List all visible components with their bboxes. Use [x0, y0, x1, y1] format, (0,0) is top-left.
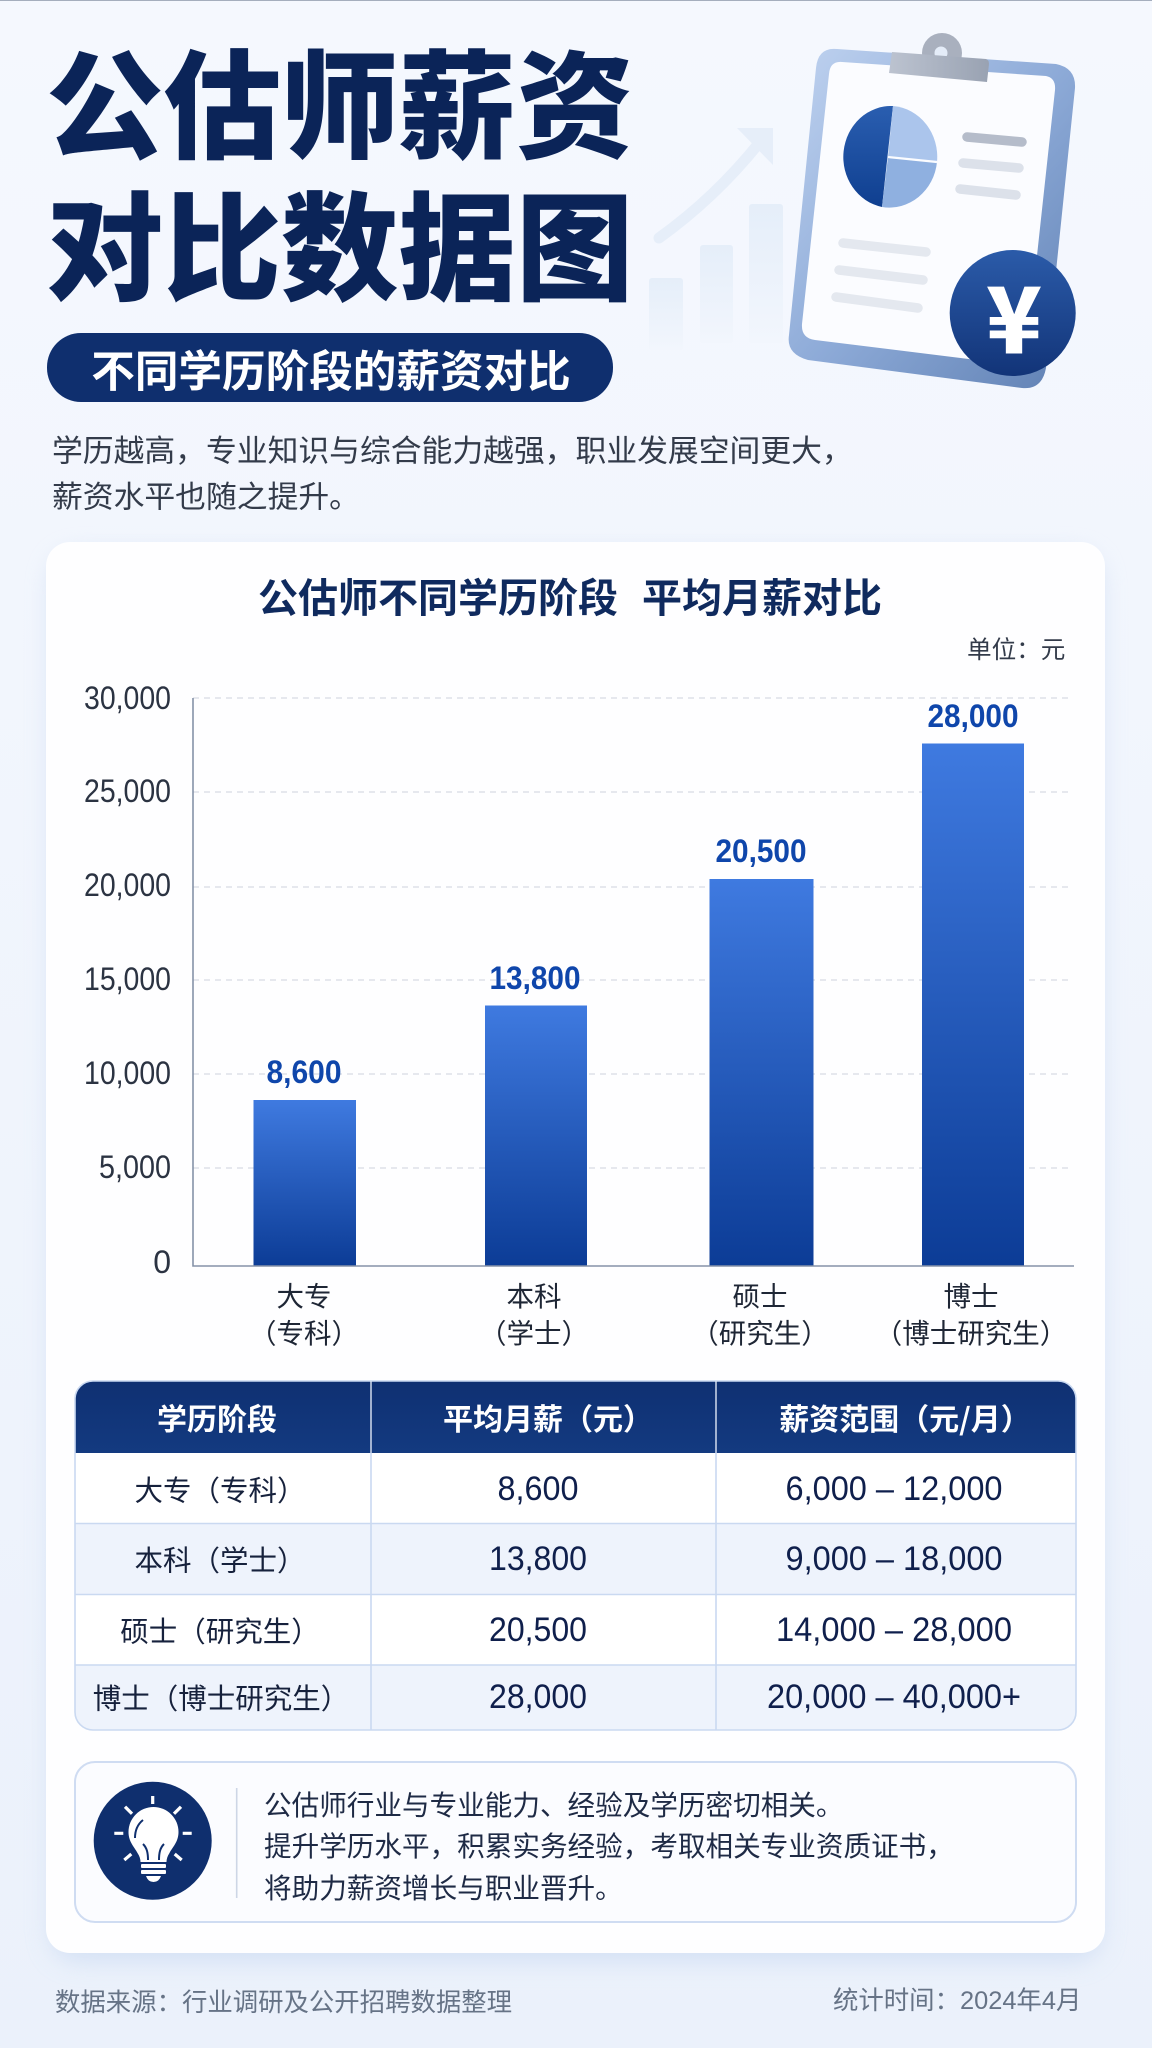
footer: 统计时间：2024年4月	[833, 1987, 1081, 2015]
pie chart	[843, 106, 937, 208]
table salary values: 9,000 – 18,000	[786, 1540, 1002, 1578]
table header text: 学历阶段	[157, 1395, 277, 1439]
table salary values: 14,000 – 28,000	[776, 1611, 1012, 1649]
table	[75, 1381, 1076, 1730]
clipboard paper	[802, 62, 1055, 366]
x axis labels: （专科）	[249, 1311, 359, 1351]
callout box	[75, 1762, 1076, 1922]
unit label: 单位：元	[967, 630, 1065, 666]
bar values: 28,000	[928, 698, 1018, 734]
chart title: 公估师不同学历阶段	[258, 566, 618, 624]
x axis labels: 本科	[506, 1274, 562, 1314]
chart title part two: 平均月薪对比	[642, 566, 882, 624]
icon: clipboard	[789, 33, 1076, 388]
table rows background	[76, 1524, 1075, 1729]
callout text: 将助力薪资增长与职业晋升。	[264, 1866, 623, 1906]
bar values	[266, 698, 1018, 1090]
bar chart	[84, 680, 1074, 1351]
y axis labels: 25,000	[84, 773, 171, 809]
grid lines	[193, 698, 1072, 1168]
bar values: 13,800	[490, 960, 580, 996]
intro text: 薪资水平也随之提升。	[52, 472, 360, 516]
icon: light bulb	[94, 1782, 212, 1900]
y axis labels: 10,000	[84, 1055, 171, 1091]
card shadow	[50, 552, 1102, 1962]
axes	[193, 698, 1074, 1266]
table first column: 博士（博士研究生）	[93, 1676, 349, 1718]
divider	[236, 1788, 238, 1898]
table first column	[93, 1468, 349, 1718]
table borders	[75, 1381, 1076, 1730]
intro text	[52, 426, 853, 516]
table first column: 本科（学士）	[134, 1538, 306, 1580]
x axis labels: 硕士	[732, 1274, 788, 1314]
panel: main card	[46, 542, 1105, 1953]
table salary values: 13,800	[489, 1540, 587, 1578]
title	[46, 13, 634, 325]
x axis labels: 博士	[944, 1274, 998, 1314]
x axis labels: 大专	[276, 1274, 332, 1314]
callout text: 公估师行业与专业能力、经验及学历密切相关。	[264, 1783, 843, 1823]
y axis labels: 5,000	[99, 1149, 171, 1185]
table header text	[157, 1395, 1031, 1439]
x axis labels: （博士研究生）	[875, 1311, 1067, 1351]
x axis labels: （研究生）	[691, 1311, 829, 1351]
table salary values	[489, 1470, 1021, 1716]
x axis labels	[249, 1274, 1067, 1351]
table header text: 薪资范围（元/月）	[779, 1395, 1031, 1439]
table first column: 硕士（研究生）	[120, 1610, 320, 1650]
bar: 大专	[254, 1100, 356, 1266]
icon: yen coin	[950, 248, 1076, 380]
subtitle pill: 不同学历阶段的薪资对比	[91, 336, 571, 400]
title: 对比数据图	[46, 155, 634, 325]
table salary values: 8,600	[498, 1470, 578, 1508]
footer	[55, 1983, 1081, 2019]
table first column: 大专（专科）	[134, 1468, 306, 1510]
intro text: 学历越高，专业知识与综合能力越强，职业发展空间更大，	[52, 426, 853, 470]
bar: 本科	[485, 1006, 587, 1266]
y axis labels: 20,000	[84, 867, 171, 903]
table salary values: 20,500	[489, 1611, 587, 1649]
clipboard board	[789, 49, 1075, 388]
callout text: 提升学历水平，积累实务经验，考取相关专业资质证书，	[264, 1824, 954, 1864]
icon: yen coin: ¥	[986, 248, 1042, 380]
icon: faint rising bars and arrow	[649, 128, 783, 350]
table header background	[75, 1381, 1076, 1453]
table salary values: 20,000 – 40,000+	[767, 1678, 1021, 1716]
table salary values: 28,000	[489, 1678, 587, 1716]
title: 公估师薪资	[46, 13, 634, 183]
bar values: 20,500	[716, 833, 806, 869]
footer: 数据来源：行业调研及公开招聘数据整理	[55, 1983, 512, 2019]
y axis labels	[84, 680, 171, 1280]
y axis labels: 15,000	[84, 961, 171, 997]
y axis labels: 0	[153, 1244, 171, 1280]
bar: 博士	[922, 744, 1024, 1266]
list lines	[836, 137, 1022, 308]
table salary values: 6,000 – 12,000	[786, 1470, 1002, 1508]
bar values: 8,600	[266, 1054, 342, 1090]
table header text: 平均月薪（元）	[443, 1395, 653, 1439]
clipboard clamp	[889, 33, 989, 82]
callout text	[264, 1783, 954, 1906]
x axis labels: （学士）	[479, 1311, 589, 1351]
bar: 硕士	[710, 879, 814, 1266]
y axis labels: 30,000	[84, 680, 171, 716]
